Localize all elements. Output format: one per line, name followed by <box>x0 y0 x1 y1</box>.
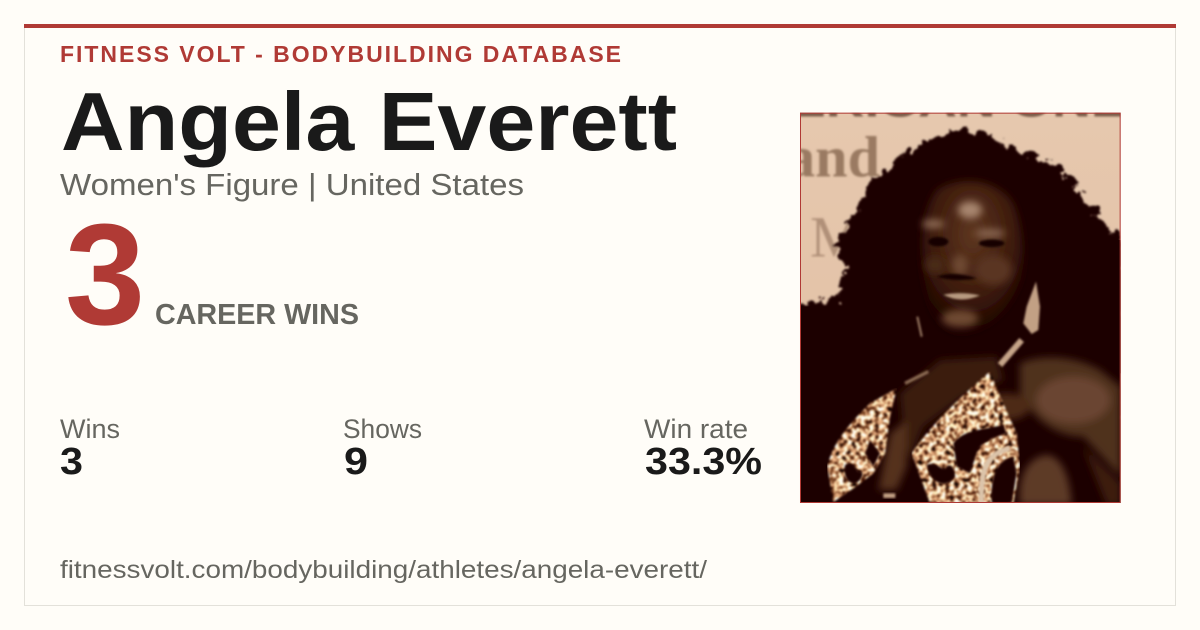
neck and chest <box>900 357 1003 460</box>
stat: win rate <box>644 414 762 483</box>
shoulder and arm <box>878 357 1121 505</box>
headline stat: career wins: CAREER WINS <box>155 299 359 331</box>
title: athlete name: Angela Everett <box>61 75 677 168</box>
stat: shows: Shows <box>343 414 422 444</box>
stat: wins: Wins <box>60 414 120 444</box>
stat: wins: 3 <box>60 441 83 483</box>
eyebrow heading: FITNESS VOLT - BODYBUILDING DATABASE <box>60 41 621 67</box>
athlete portrait: ERICAN ONE <box>790 82 1127 126</box>
stat: wins <box>60 414 120 483</box>
eyes and mouth <box>928 237 1004 300</box>
sequined top <box>827 340 1022 503</box>
face <box>922 181 1023 333</box>
earrings <box>917 282 1040 337</box>
headline stat: career wins <box>65 194 359 355</box>
hair and dark background <box>793 128 1127 510</box>
source url: fitnessvolt.com/bodybuilding/athletes/angela-everett/ <box>60 556 707 584</box>
athlete portrait: and <box>786 125 880 190</box>
stat: shows <box>343 414 422 483</box>
stat: win rate: Win rate <box>644 414 748 444</box>
athlete portrait: M <box>810 205 862 270</box>
stat: win rate: 33.3% <box>645 441 762 483</box>
headline stat: career wins: 3 <box>65 194 145 355</box>
stat: shows: 9 <box>344 441 368 483</box>
athlete portrait <box>800 112 1121 503</box>
subtitle: division and country: Women's Figure | United States <box>60 167 524 202</box>
